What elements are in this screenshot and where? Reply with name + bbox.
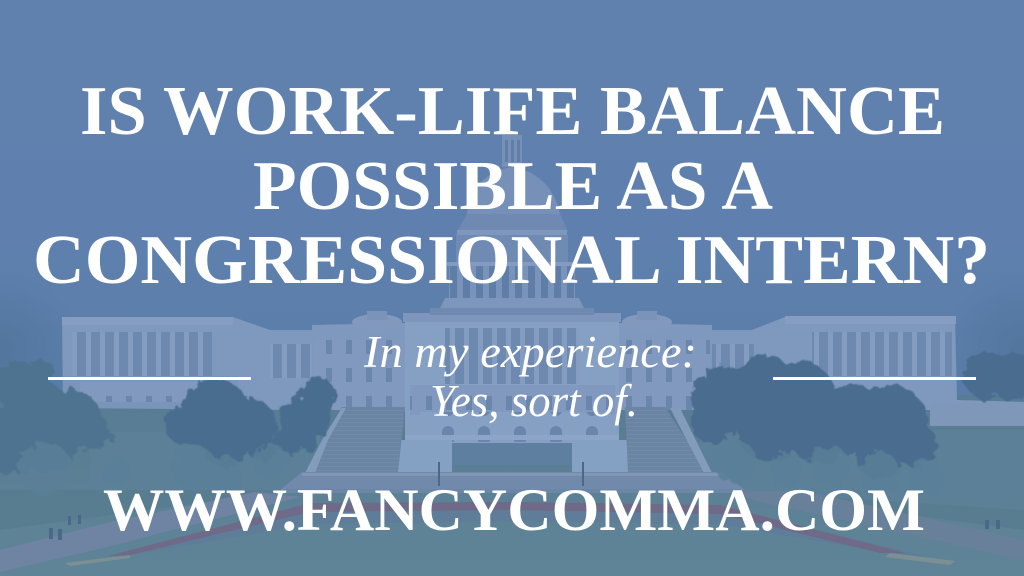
subtitle line 1: In my experience:	[363, 327, 697, 377]
website url: WWW.FANCYCOMMA.COM	[103, 477, 925, 543]
left wing of the Capitol	[62, 311, 407, 410]
left rule	[48, 377, 251, 380]
sky	[0, 0, 1024, 430]
trees	[0, 352, 1024, 496]
Capitol dome	[430, 119, 594, 315]
central building and portico	[390, 313, 634, 472]
title	[33, 73, 990, 299]
flower beds	[65, 502, 955, 566]
lawn and grounds	[0, 395, 1024, 576]
right wing of the Capitol	[617, 311, 1024, 426]
title line 1: IS WORK-LIFE BALANCE	[80, 73, 945, 150]
dark right trees	[691, 352, 1024, 479]
dark background trees left	[0, 358, 111, 475]
subtitle line 2: Yes, sort of.	[430, 376, 638, 426]
subtitle	[363, 327, 697, 426]
right rule	[773, 377, 976, 380]
lighter foreground trees	[19, 440, 943, 496]
title line 2: POSSIBLE AS A	[253, 148, 773, 225]
plaza	[280, 472, 745, 490]
dark centre-left trees	[165, 377, 335, 467]
staircases	[280, 407, 745, 493]
visitors and lamp posts	[49, 462, 1000, 540]
title line 3: CONGRESSIONAL INTERN?	[33, 222, 990, 299]
